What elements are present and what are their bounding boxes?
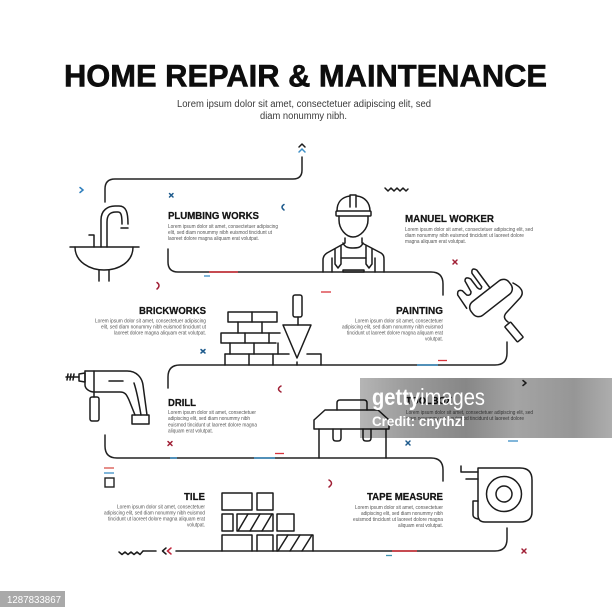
- text block: drill: aliquam erat volutpat.: [168, 428, 213, 434]
- icon: manual worker: [323, 195, 384, 272]
- icon: bricks and trowel: [221, 295, 321, 365]
- text block: manuel worker: magna aliquam erat volutpat.: [405, 239, 466, 245]
- text block: drill: DRILL: [168, 398, 196, 409]
- icon: tape measure: [461, 466, 532, 522]
- icon: tiles: [222, 493, 313, 551]
- text block: painting: volutpat.: [425, 336, 443, 342]
- text block: brickworks: elit, sed diam nonummy nibh euismod tincidunt ut: [101, 324, 207, 330]
- text block: tile: [104, 492, 206, 528]
- text block: tile: TILE: [184, 492, 205, 503]
- image id tag: 1287833867: [7, 594, 61, 606]
- icon: paint roller: [458, 269, 523, 342]
- text block: tile: adipiscing elit, sed diam nonummy nibh euismod: [104, 510, 205, 516]
- text block: manuel worker: diam nonummy nibh euismod tincidunt ut laoreet dolore: [405, 233, 524, 239]
- connector path: [105, 157, 507, 551]
- text block: manuel worker: [405, 214, 533, 245]
- subtitle: [177, 99, 431, 122]
- text block: tape measure: TAPE MEASURE: [367, 492, 443, 503]
- text block: tape measure: aliquam erat volutpat.: [398, 523, 443, 529]
- text block: drill: [168, 398, 257, 434]
- text block: tile: Lorem ipsum dolor sit amet, consectetuer: [117, 504, 205, 510]
- text block: brickworks: BRICKWORKS: [139, 306, 206, 317]
- text block: painting: adipiscing elit, sed diam nonummy nibh euismod: [342, 324, 443, 330]
- icon: sink: [70, 206, 139, 281]
- decorative accents: [80, 188, 526, 556]
- text block: painting: Lorem ipsum dolor sit amet, consectetuer: [355, 318, 443, 324]
- text block: drill: euismod tincidunt ut laoreet dolore magna: [168, 422, 257, 428]
- text block: brickworks: Lorem ipsum dolor sit amet, consectetuer adipiscing: [95, 318, 206, 324]
- image id tag: [0, 591, 65, 607]
- text block: tape measure: [353, 492, 443, 529]
- text block: plumbing works: Lorem ipsum dolor sit amet, consectetuer adipiscing: [168, 224, 278, 230]
- text block: toolbox: diam nonummy nibh euismod tincidunt ut laoreet dolore: [406, 416, 524, 422]
- text block: painting: tincidunt ut laoreet dolore magna aliquam erat: [347, 330, 444, 336]
- text block: tile: volutpat.: [187, 522, 205, 528]
- watermark: gettyimages: [372, 384, 485, 410]
- text block: tape measure: euismod tincidunt ut laoreet dolore magna: [353, 517, 443, 523]
- text block: drill: adipiscing elit, sed diam nonummy nibh: [168, 416, 250, 422]
- text block: tile: tincidunt ut laoreet dolore magna aliquam erat: [108, 516, 206, 522]
- arrow: top chevrons: [299, 144, 305, 152]
- subtitle: diam nonummy nibh.: [260, 111, 347, 122]
- text block: plumbing works: [168, 211, 278, 242]
- text block: brickworks: laoreet dolore magna aliquam erat volutpat.: [114, 330, 206, 336]
- text block: brickworks: [95, 306, 207, 336]
- text block: plumbing works: PLUMBING WORKS: [168, 211, 259, 222]
- text block: painting: PAINTING: [396, 306, 443, 317]
- text block: toolbox: Lorem ipsum dolor sit amet, consectetuer adipiscing elit, sed: [406, 410, 533, 416]
- text block: manuel worker: MANUEL WORKER: [405, 214, 495, 225]
- text block: plumbing works: laoreet dolore magna aliquam erat volutpat.: [168, 236, 259, 242]
- text block: tape measure: Lorem ipsum dolor sit amet, consectetuer: [355, 505, 443, 511]
- text block: manuel worker: Lorem ipsum dolor sit amet, consectetuer adipiscing elit, sed: [405, 227, 533, 233]
- text block: toolbox: TOOLBOX: [406, 396, 452, 407]
- text block: drill: Lorem ipsum dolor sit amet, consectetuer: [168, 410, 256, 416]
- text block: painting: [342, 306, 444, 342]
- text block: tape measure: adipiscing elit, sed diam nonummy nibh: [361, 511, 443, 517]
- watermark: [360, 378, 612, 438]
- icon: drill: [66, 371, 149, 424]
- text block: plumbing works: elit, sed diam nonummy nibh euismod tincidunt ut: [168, 230, 273, 236]
- title: HOME REPAIR & MAINTENANCE: [64, 58, 547, 94]
- icon: toolbox: [314, 400, 389, 458]
- text block: toolbox: [406, 396, 533, 422]
- subtitle: Lorem ipsum dolor sit amet, consectetuer adipiscing elit, sed: [177, 99, 431, 110]
- watermark: Credit: cnythzl: [372, 413, 465, 429]
